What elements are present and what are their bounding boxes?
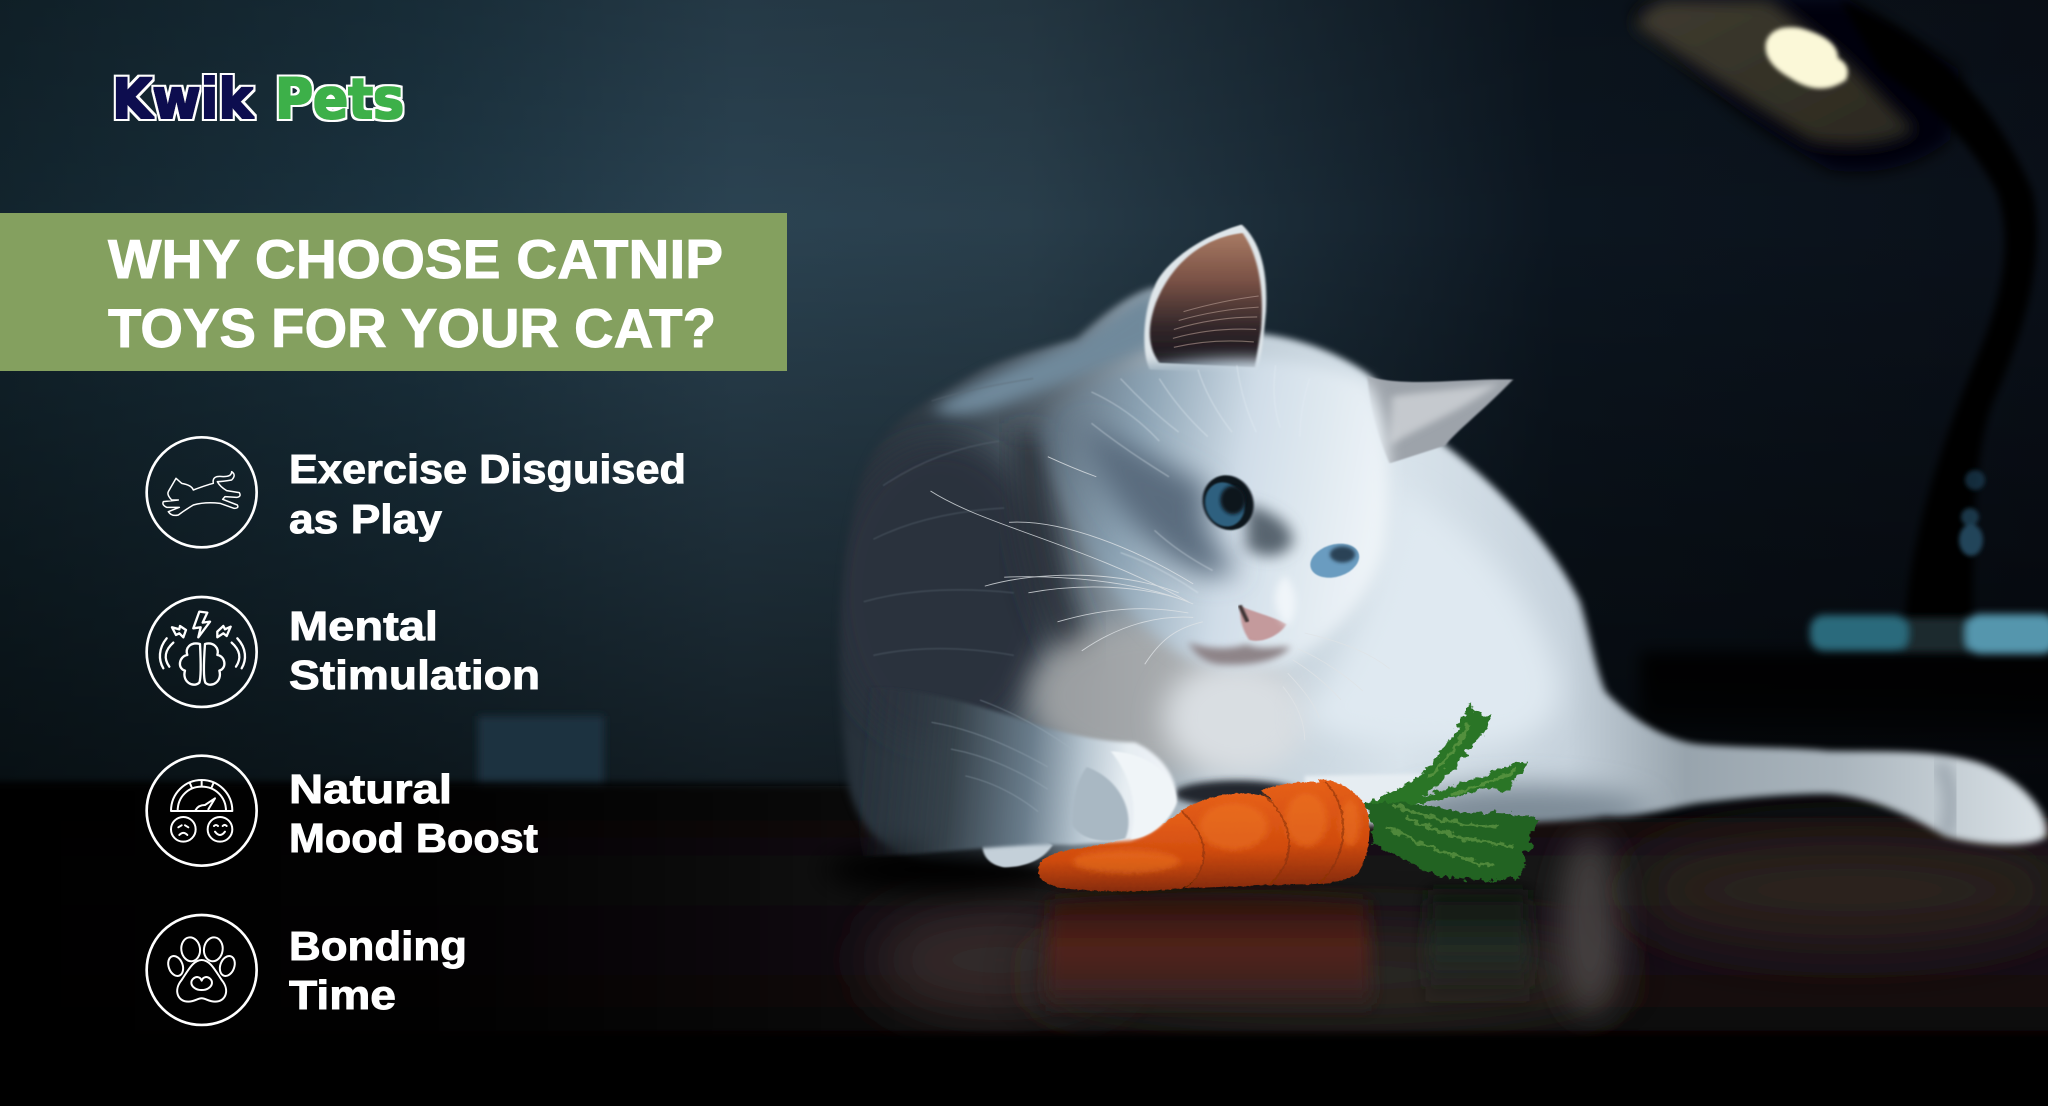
back rim light: [931, 289, 1159, 414]
cat foreleg and paw: [852, 687, 1177, 856]
benefit: mental stimulation: [147, 597, 540, 707]
bottom black band: [0, 1034, 2048, 1106]
label: [289, 766, 538, 861]
label: [289, 446, 686, 542]
benefit: exercise: [147, 437, 686, 547]
muzzle and mouth: [1188, 642, 1290, 665]
paw toes: [1072, 751, 1176, 841]
lower body shade: [1397, 785, 1649, 838]
cat body: [840, 284, 2048, 870]
table reflection of cat: [870, 835, 2048, 1025]
carrot highlights: [1073, 793, 1360, 873]
label: [289, 923, 467, 1018]
neck shadow: [1028, 432, 1077, 655]
eye right: [1305, 538, 1364, 584]
small back paw: [982, 837, 1053, 867]
right body highlight: [1314, 519, 1564, 744]
white cat: [840, 224, 2048, 900]
label: Natural: [289, 766, 452, 812]
head: [1038, 359, 1389, 669]
lamp shade: [1635, 0, 1915, 145]
label: Mood Boost: [289, 815, 538, 861]
icon: brain with lightning: [147, 597, 257, 707]
lamp neck: [1840, 0, 2037, 620]
lamp bokeh dots: [1959, 470, 1985, 556]
carrot seams: [1182, 782, 1343, 887]
title text: WHY CHOOSE CATNIP: [108, 228, 723, 290]
Kwik Pets logo: [112, 67, 404, 131]
label: Bonding: [289, 923, 467, 969]
label: [289, 603, 540, 698]
background blurred blue box: [478, 716, 604, 796]
lamp base shadow: [1640, 652, 2048, 762]
table surface: [0, 782, 2048, 1106]
label: Stimulation: [289, 652, 540, 698]
lamp base glow: [1810, 614, 2048, 654]
shadow below cat: [825, 847, 1058, 892]
leg strip behind carrot: [1305, 774, 1421, 803]
ear right: [1368, 376, 1513, 463]
title text: TOYS FOR YOUR CAT?: [108, 297, 716, 359]
icon: paw print: [147, 915, 257, 1025]
ear hair: [1173, 296, 1259, 347]
carrot toy: [1038, 702, 1540, 891]
dark flank: [908, 440, 1059, 716]
label: Exercise Disguised: [289, 446, 686, 492]
fur strokes: [1091, 365, 1310, 593]
leaf texture: [1387, 723, 1517, 867]
lamp shade halo: [1630, 0, 1960, 172]
benefit: bonding time: [147, 915, 467, 1025]
whiskers: [931, 457, 1390, 740]
label: as Play: [289, 496, 442, 542]
lamp light: [1766, 27, 1848, 89]
label: Mental: [289, 603, 438, 649]
carrot body: [1038, 779, 1369, 891]
Kwik Pets logo: Pets: [275, 67, 404, 131]
nose: [1240, 606, 1286, 641]
benefit: natural mood boost: [147, 756, 538, 866]
chest: [1012, 616, 1216, 770]
icon: mood gauge: [147, 756, 257, 866]
carrot reflection: [1045, 890, 1530, 1015]
desk lamp: [1630, 0, 2048, 762]
flank fur streaks: [864, 379, 1033, 655]
title text: [108, 228, 723, 359]
ear left: [1144, 225, 1266, 374]
dark hollow behind carrot: [1174, 780, 1300, 807]
Kwik Pets logo: Kwik: [112, 67, 254, 131]
foreleg: [852, 687, 1177, 856]
tail crease: [1940, 762, 1951, 838]
label: Time: [289, 972, 396, 1018]
eye left: [1196, 470, 1260, 535]
leg fur: [931, 700, 1072, 812]
title banner: [0, 213, 787, 371]
icon: running cat: [147, 437, 257, 547]
carrot greens: [1364, 702, 1540, 880]
face shadow: [1082, 423, 1237, 576]
